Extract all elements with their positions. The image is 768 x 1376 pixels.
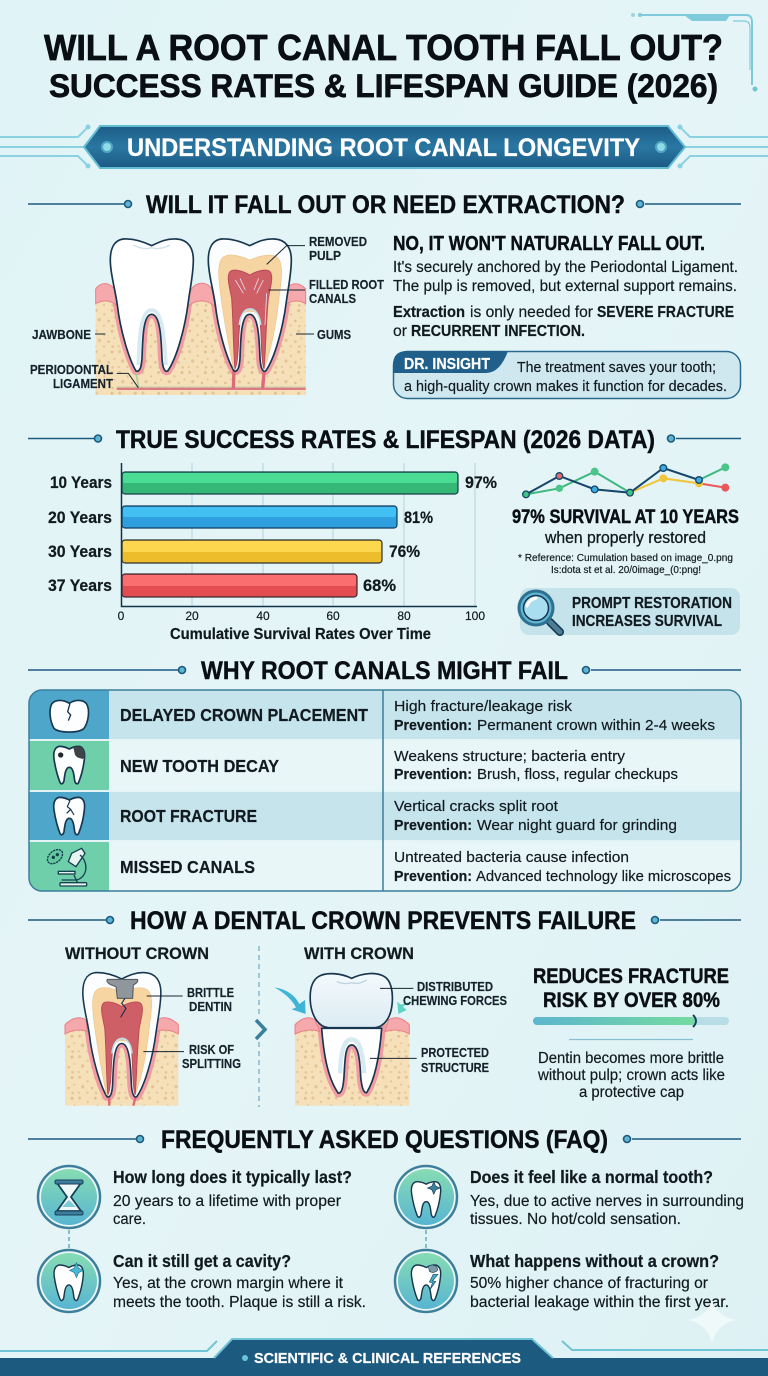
callout: prompt restoration: PROMPT RESTORATION bbox=[572, 595, 732, 612]
icon: decayed tooth bbox=[54, 746, 85, 784]
heading: will it fall out: WILL IT FALL OUT OR NEED EXTRACTION? bbox=[146, 191, 625, 219]
stat: reduces fracture risk: without pulp; crown acts like bbox=[537, 1067, 725, 1084]
anatomy labels: FILLED ROOT bbox=[309, 277, 384, 292]
heading: how a dental crown prevents failure: HOW A DENTAL CROWN PREVENTS FAILURE bbox=[130, 907, 636, 935]
table: failure causes bbox=[29, 690, 741, 891]
treated tooth bbox=[208, 239, 291, 371]
footer: scientific references: SCIENTIFIC & CLINICAL REFERENCES bbox=[254, 1350, 521, 1367]
diagram: with crown: CHEWING FORCES bbox=[403, 993, 507, 1008]
healthy tooth bbox=[110, 239, 193, 371]
faq item: cavity: meets the tooth. Plaque is still a risk. bbox=[113, 1294, 366, 1311]
icon: tooth with bolt bbox=[395, 1250, 457, 1312]
callout: dr insight: a high-quality crown makes it function for decades. bbox=[404, 378, 727, 395]
text block: no it won't fall out: Extraction bbox=[393, 304, 465, 321]
text block: no it won't fall out: or bbox=[393, 323, 408, 340]
stat: reduces fracture risk: RISK BY OVER 80% bbox=[543, 989, 720, 1012]
diagram: without crown: BRITTLE bbox=[187, 985, 234, 1000]
stat: 97 percent survival: * Reference: Cumulation based on image_0.png bbox=[518, 552, 733, 564]
footer: scientific references bbox=[0, 1339, 768, 1376]
icon: fractured tooth bbox=[54, 797, 85, 835]
faq item: normal tooth bbox=[395, 1166, 744, 1228]
bar chart: survival rates: 100 bbox=[465, 609, 485, 623]
anatomy labels: PULP bbox=[309, 248, 341, 263]
diagram: without crown bbox=[65, 944, 241, 1106]
faq item: cavity: Yes, at the crown margin where it bbox=[113, 1275, 344, 1292]
row: new tooth decay: Brush, floss, regular checkups bbox=[477, 766, 678, 783]
heading: why root canals might fail: WHY ROOT CANALS MIGHT FAIL bbox=[201, 657, 568, 685]
faq item: how long: How long does it typically last? bbox=[113, 1167, 352, 1187]
bar: 37 years 68% bbox=[48, 574, 396, 597]
arrow: left force bbox=[274, 987, 306, 1014]
row: root fracture: ROOT FRACTURE bbox=[120, 806, 257, 826]
text block: no it won't fall out: SEVERE FRACTURE bbox=[597, 304, 734, 321]
faq item: how long: 20 years to a lifetime with proper bbox=[113, 1193, 341, 1210]
row: missed canals: MISSED CANALS bbox=[120, 857, 255, 877]
icon: magnifier bbox=[519, 591, 560, 632]
callout: dr insight: The treatment saves your tooth; bbox=[517, 359, 716, 376]
bar: 20 years 81%: 81% bbox=[404, 508, 433, 527]
row: missed canals: Advanced technology like microscopes bbox=[476, 868, 731, 885]
stat: reduces fracture risk: Dentin becomes more brittle bbox=[538, 1050, 724, 1067]
faq item: cavity: Can it still get a cavity? bbox=[113, 1251, 291, 1271]
text block: no it won't fall out: It's securely anchored by the Periodontal Ligament. bbox=[393, 259, 738, 276]
bar: 10 years 97% bbox=[50, 472, 497, 494]
text block: no it won't fall out: The pulp is removed, but external support remains. bbox=[393, 278, 737, 295]
heading: faq: FREQUENTLY ASKED QUESTIONS (FAQ) bbox=[161, 1126, 608, 1154]
bar: 10 years 97%: 97% bbox=[465, 473, 497, 492]
text block: no it won't fall out bbox=[393, 233, 738, 340]
icon: cracked crown bbox=[50, 700, 89, 732]
callout: dr insight bbox=[393, 351, 740, 398]
leader lines bbox=[95, 246, 314, 388]
faq item: cavity bbox=[38, 1250, 366, 1312]
diagram: tooth anatomy bbox=[30, 234, 384, 395]
row: delayed crown placement bbox=[50, 698, 715, 734]
row: delayed crown placement: Prevention: bbox=[394, 717, 472, 734]
anatomy labels: LIGAMENT bbox=[53, 376, 113, 391]
row: delayed crown placement: Permanent crown within 2-4 weeks bbox=[477, 717, 715, 734]
progress bar bbox=[533, 1015, 729, 1027]
row: delayed crown placement: DELAYED CROWN PLACEMENT bbox=[120, 705, 368, 725]
text block: no it won't fall out: RECURRENT INFECTION. bbox=[411, 323, 585, 340]
stat: reduces fracture risk: REDUCES FRACTURE bbox=[533, 965, 729, 988]
row: root fracture: Wear night guard for grinding bbox=[477, 817, 677, 834]
title: WILL A ROOT CANAL TOOTH FALL OUT? bbox=[44, 27, 723, 68]
bar chart: survival rates bbox=[48, 463, 497, 643]
row: new tooth decay: Prevention: bbox=[394, 766, 472, 783]
faq item: without crown: 50% higher chance of fracturing or bbox=[470, 1275, 708, 1292]
bar: 30 years 76%: 76% bbox=[389, 542, 420, 561]
bar: 30 years 76% bbox=[48, 540, 420, 563]
bar: 20 years 81% bbox=[48, 506, 433, 528]
decoration: top-right circuit frame bbox=[631, 13, 758, 92]
anatomy labels: JAWBONE bbox=[32, 327, 91, 342]
icon: tooth with nerve spark bbox=[395, 1166, 457, 1228]
diagram: without crown: DENTIN bbox=[189, 999, 232, 1014]
jawbone block bbox=[96, 288, 306, 395]
callout: prompt restoration: INCREASES SURVIVAL bbox=[572, 613, 722, 630]
decoration: sparkle bbox=[688, 1300, 736, 1344]
faq connectors bbox=[69, 1230, 426, 1249]
faq item: normal tooth: tissues. No hot/cold sensation. bbox=[470, 1211, 681, 1228]
anatomy labels bbox=[30, 234, 384, 391]
diagram: with crown: WITH CROWN bbox=[304, 944, 414, 963]
faq item: without crown bbox=[395, 1250, 729, 1312]
row: missed canals: Untreated bacteria cause infection bbox=[394, 849, 629, 866]
bar chart: survival rates: 40 bbox=[256, 609, 270, 623]
diagram: with crown bbox=[274, 944, 507, 1106]
stat: 97 percent survival bbox=[512, 507, 739, 576]
row: new tooth decay: Weakens structure; bacteria entry bbox=[394, 748, 626, 765]
title: SUCCESS RATES & LIFESPAN GUIDE (2026) bbox=[49, 68, 718, 104]
row: new tooth decay: NEW TOOTH DECAY bbox=[120, 756, 279, 776]
diagram: with crown: PROTECTED bbox=[421, 1045, 489, 1060]
row: delayed crown placement: High fracture/leakage risk bbox=[394, 698, 573, 715]
faq item: how long: care. bbox=[113, 1211, 146, 1228]
bar: 10 years 97%: 10 Years bbox=[50, 473, 112, 492]
text block: no it won't fall out: is only needed for bbox=[470, 304, 594, 321]
stat: 97 percent survival: Is:dota st et al. 20/0image_(0:png! bbox=[551, 564, 701, 576]
callout: prompt restoration bbox=[519, 588, 740, 635]
banner: understanding root canal longevity bbox=[0, 124, 768, 168]
faq item: normal tooth: Does it feel like a normal tooth? bbox=[470, 1167, 713, 1187]
bar: 20 years 81%: 20 Years bbox=[48, 508, 112, 527]
icon: bacteria and microscope bbox=[45, 847, 87, 886]
bar chart: survival rates: 20 bbox=[185, 609, 199, 623]
bar chart: survival rates: 60 bbox=[326, 609, 340, 623]
line chart: trend sparkline bbox=[523, 463, 729, 498]
bar: 37 years 68%: 37 Years bbox=[48, 576, 112, 595]
bar chart: survival rates: 0 bbox=[118, 609, 125, 623]
arrow: right force bbox=[397, 1001, 413, 1014]
text block: no it won't fall out: NO, IT WON'T NATURALLY FALL OUT. bbox=[393, 233, 705, 255]
heading: why root canals might fail bbox=[28, 657, 741, 685]
divider with chevron bbox=[256, 946, 265, 1107]
callout: dr insight: DR. INSIGHT bbox=[404, 356, 490, 373]
stat: 97 percent survival: 97% SURVIVAL AT 10 YEARS bbox=[512, 507, 739, 528]
icon: hourglass bbox=[38, 1166, 100, 1228]
banner: understanding root canal longevity: UNDERSTANDING ROOT CANAL LONGEVITY bbox=[127, 134, 640, 162]
heading: faq bbox=[28, 1126, 741, 1154]
icon: tooth with sparkle bbox=[38, 1250, 100, 1312]
row: new tooth decay bbox=[54, 746, 678, 784]
anatomy labels: PERIODONTAL bbox=[30, 362, 113, 377]
anatomy labels: CANALS bbox=[309, 291, 356, 306]
diagram: without crown: RISK OF bbox=[189, 1042, 234, 1057]
diagram: with crown: STRUCTURE bbox=[421, 1060, 489, 1075]
row: root fracture: Prevention: bbox=[394, 817, 472, 834]
bar: 37 years 68%: 68% bbox=[363, 576, 396, 595]
row: root fracture: Vertical cracks split root bbox=[394, 798, 559, 815]
anatomy labels: REMOVED bbox=[309, 234, 367, 249]
faq item: without crown: What happens without a crown? bbox=[470, 1251, 719, 1271]
bar chart: survival rates: 80 bbox=[397, 609, 411, 623]
faq item: how long bbox=[38, 1166, 352, 1228]
anatomy labels: GUMS bbox=[317, 327, 351, 342]
row: missed canals bbox=[45, 847, 731, 886]
diagram: without crown: WITHOUT CROWN bbox=[65, 944, 209, 963]
ligament line bbox=[117, 370, 306, 390]
row: missed canals: Prevention: bbox=[394, 868, 472, 885]
faq item: normal tooth: Yes, due to active nerves in surrounding bbox=[470, 1193, 744, 1210]
heading: true success rates: TRUE SUCCESS RATES & LIFESPAN (2026 DATA) bbox=[116, 426, 655, 454]
diagram: with crown: DISTRIBUTED bbox=[417, 979, 493, 994]
diagram: without crown: SPLITTING bbox=[182, 1056, 241, 1071]
bar: 30 years 76%: 30 Years bbox=[48, 542, 112, 561]
faq item: without crown: bacterial leakage within the first year. bbox=[470, 1294, 729, 1311]
stat: reduces fracture risk bbox=[533, 965, 729, 1101]
title bbox=[44, 27, 723, 104]
bar chart: survival rates: Cumulative Survival Rates Over Time bbox=[170, 626, 431, 643]
stat: reduces fracture risk: a protective cap bbox=[579, 1084, 684, 1101]
stat: 97 percent survival: when properly restored bbox=[544, 529, 706, 547]
row: root fracture bbox=[54, 797, 677, 835]
